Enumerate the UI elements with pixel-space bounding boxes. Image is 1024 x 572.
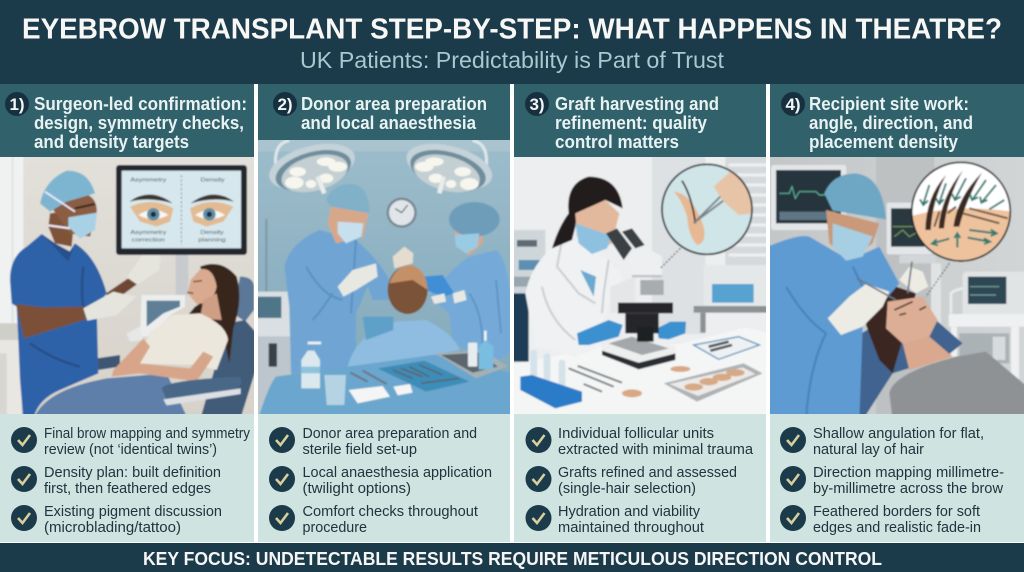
magnified graft inset bbox=[662, 164, 752, 254]
brow plan monitor bbox=[116, 165, 247, 255]
step 4 checklist: Direction mapping millimetre- bbox=[813, 464, 1004, 481]
step 2 checklist: Donor area preparation and bbox=[302, 425, 477, 442]
patient monitor on cart bbox=[949, 272, 1024, 380]
illustration: surgeon placing brow grafts bbox=[763, 147, 1024, 423]
step 3 checklist: Grafts refined and assessed bbox=[558, 464, 737, 481]
wall clock bbox=[387, 198, 417, 228]
footer: key focus banner: KEY FOCUS: UNDETECTABLE RESULTS REQUIRE METICULOUS DIRECTION CONTROL bbox=[143, 548, 882, 569]
step 4 heading band: 4) bbox=[785, 95, 801, 114]
step 1 checklist: Density plan: built definition bbox=[44, 464, 221, 481]
brow plan monitor: planning bbox=[198, 238, 226, 244]
operating lights bbox=[268, 140, 493, 195]
subtitle: UK Patients: Predictability is Part of Trust bbox=[300, 47, 725, 73]
step 4 checklist: Shallow angulation for flat, bbox=[813, 425, 984, 442]
step 3 heading band bbox=[514, 84, 766, 157]
step 1 heading band bbox=[0, 84, 254, 157]
step 4 checklist: by-millimetre across the brow bbox=[813, 480, 1003, 497]
step 2 checklist: Local anaesthesia application bbox=[302, 464, 492, 481]
step 3 heading band: Graft harvesting and bbox=[555, 94, 719, 114]
step 4 heading band: placement density bbox=[809, 132, 958, 152]
brow plan monitor: Density bbox=[200, 230, 224, 236]
step 2 checklist: sterile field set-up bbox=[302, 441, 417, 458]
step 3 checklist bbox=[514, 414, 766, 542]
illustration: technician refining grafts at microscope bbox=[514, 157, 766, 414]
step 4 heading band: angle, direction, and bbox=[809, 113, 973, 133]
footer: key focus banner bbox=[0, 543, 1024, 572]
step 4 heading band: Recipient site work: bbox=[809, 94, 969, 114]
step 2 checklist bbox=[258, 414, 510, 542]
title: EYEBROW TRANSPLANT STEP-BY-STEP: WHAT HAPPENS IN THEATRE? bbox=[22, 14, 1002, 46]
panel: step 4 recipient site work bbox=[763, 84, 1024, 542]
step 3 checklist: (single-hair selection) bbox=[558, 480, 696, 497]
step 1 checklist: review (not ‘identical twins’) bbox=[44, 441, 217, 458]
step 3 checklist: maintained throughout bbox=[558, 519, 705, 536]
step 4 checklist: natural lay of hair bbox=[813, 441, 924, 458]
step 3 heading band: 3) bbox=[529, 95, 545, 114]
step 1 checklist bbox=[0, 414, 254, 542]
microscope bbox=[602, 228, 680, 369]
panel: step 3 graft harvesting bbox=[509, 84, 772, 542]
step 1 heading band: design, symmetry checks, bbox=[34, 113, 244, 133]
illustration: theatre team preparing donor area bbox=[258, 140, 510, 414]
step 2 heading band: and local anaesthesia bbox=[301, 113, 477, 133]
step 3 checklist: Individual follicular units bbox=[558, 425, 714, 442]
step 4 heading band bbox=[770, 84, 1024, 157]
instruments and bottles on the table bbox=[301, 331, 508, 405]
step 1 checklist: Existing pigment discussion bbox=[44, 503, 222, 520]
step 4 checklist bbox=[770, 414, 1024, 542]
step 2 checklist: procedure bbox=[302, 519, 367, 536]
brow plan monitor: correction bbox=[132, 238, 165, 244]
panel: step 2 donor area preparation bbox=[253, 84, 516, 542]
step 4 checklist: Feathered borders for soft bbox=[813, 503, 981, 520]
brow plan monitor: Asymmetry bbox=[130, 230, 167, 236]
step 1 checklist: Final brow mapping and symmetry bbox=[44, 425, 250, 442]
step 1 checklist: first, then feathered edges bbox=[44, 480, 211, 497]
header band bbox=[0, 0, 1024, 84]
brow plan monitor: Density bbox=[201, 178, 225, 184]
panel: step 1 surgeon-led confirmation bbox=[0, 84, 260, 542]
step 1 heading band: 1) bbox=[9, 95, 25, 114]
graft tray, tools and vial rack bbox=[520, 337, 763, 408]
step 2 checklist: (twilight options) bbox=[302, 480, 411, 497]
step 2 heading band bbox=[258, 84, 510, 140]
step 1 heading band: Surgeon-led confirmation: bbox=[34, 94, 247, 114]
step 1 checklist: (microblading/tattoo) bbox=[44, 519, 181, 536]
step 1 heading band: and density targets bbox=[34, 132, 189, 152]
step 3 heading band: refinement: quality bbox=[555, 113, 707, 133]
magnified hair direction inset bbox=[909, 162, 1013, 267]
step 2 heading band: 2) bbox=[277, 95, 293, 114]
step 3 heading band: control matters bbox=[555, 132, 679, 152]
step 2 checklist: Comfort checks throughout bbox=[302, 503, 479, 520]
illustration: surgeon reviewing brow plan with patient bbox=[0, 147, 260, 423]
step 3 checklist: Hydration and viability bbox=[558, 503, 700, 520]
step 2 heading band: Donor area preparation bbox=[301, 94, 487, 114]
step 4 checklist: edges and realistic fade-in bbox=[813, 519, 981, 536]
step 3 checklist: extracted with minimal trauma bbox=[558, 441, 754, 458]
brow plan monitor: Asymmetry bbox=[130, 178, 167, 184]
